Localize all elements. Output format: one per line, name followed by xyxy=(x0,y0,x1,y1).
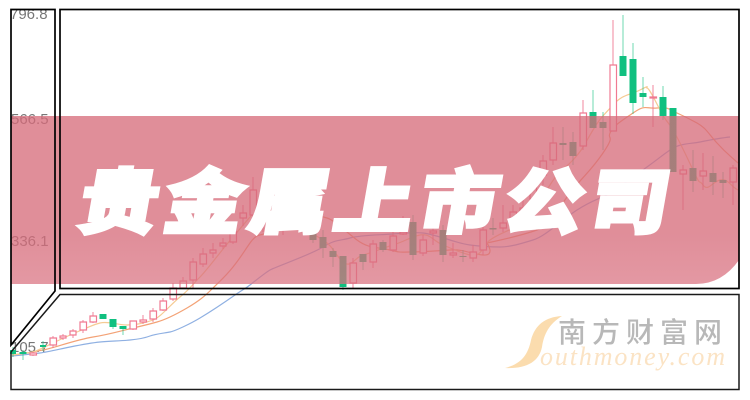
moving average lines xyxy=(12,87,738,356)
pink title band xyxy=(11,116,739,284)
rising candles xyxy=(30,20,736,356)
logo domain: outhmoney.com xyxy=(540,342,725,371)
price axis labels: 105.7 xyxy=(11,339,49,356)
price axis labels xyxy=(10,6,49,356)
watermark: southmoney logo xyxy=(505,316,725,371)
frame: main chart panel xyxy=(60,10,739,288)
price axis labels: 336.1 xyxy=(11,233,49,250)
frame: lower chart panel xyxy=(11,294,739,390)
price axis labels: 566.5 xyxy=(11,111,49,128)
frame: left axis panel xyxy=(11,10,55,345)
logo chinese name: 南方财富网 xyxy=(558,317,722,348)
logo swoosh xyxy=(505,316,562,368)
title: 贵金属上市公司 xyxy=(73,163,683,242)
price axis labels: 796.8 xyxy=(10,6,48,23)
